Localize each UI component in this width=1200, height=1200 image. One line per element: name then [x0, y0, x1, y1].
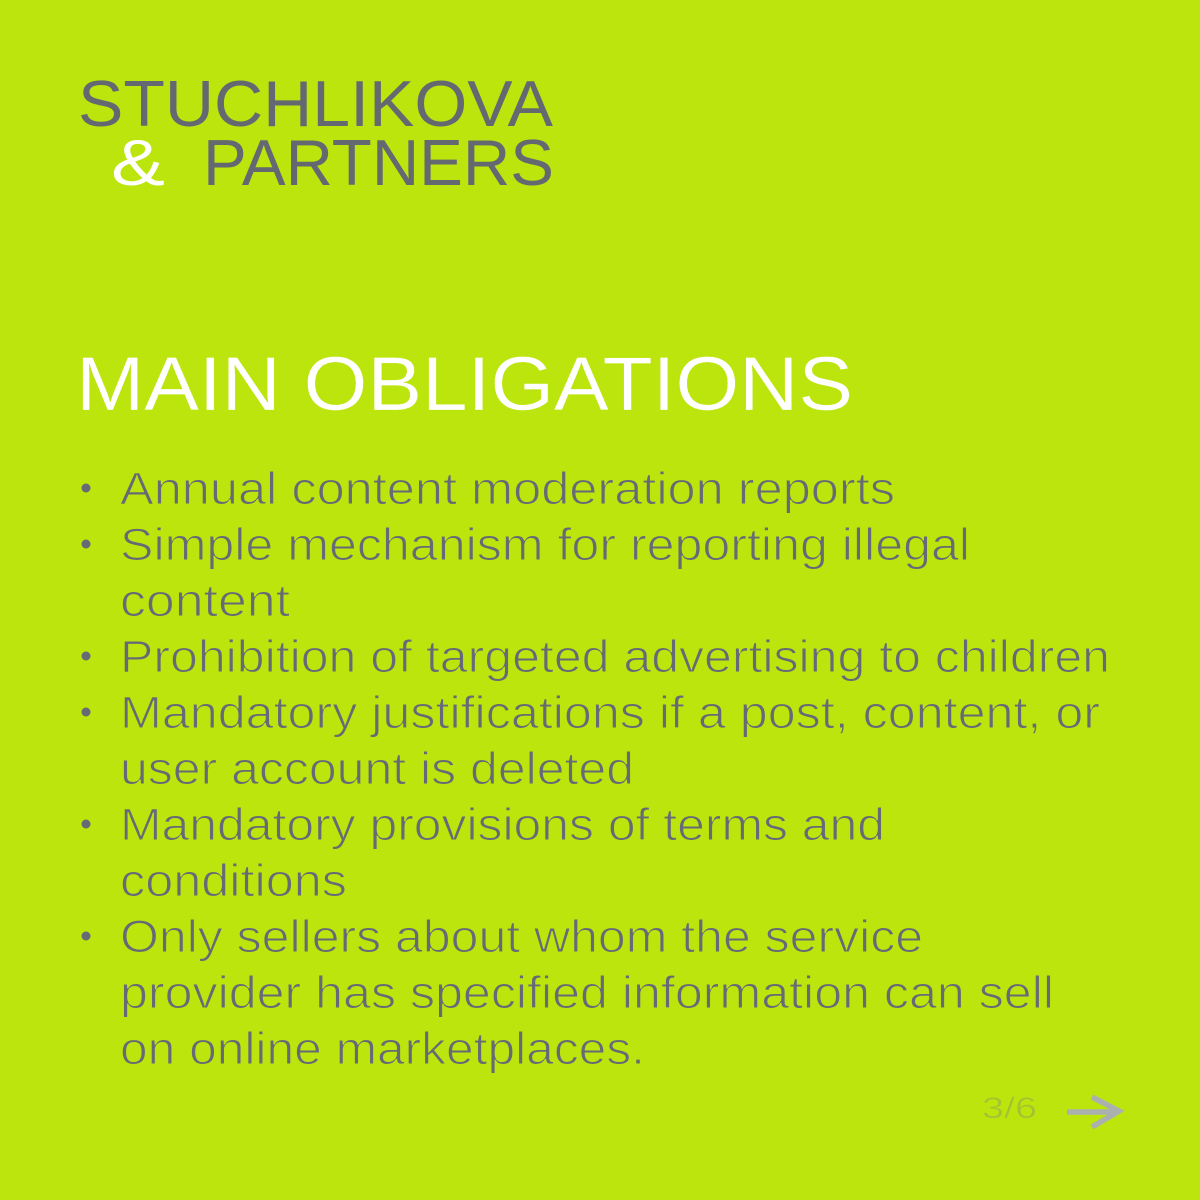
- logo line: PARTNERS: PARTNERS: [203, 126, 554, 199]
- logo: [78, 67, 554, 199]
- page counter: 3/6: [982, 1092, 1037, 1125]
- bullet item: targeted advertising: Prohibition of targeted advertising to children: [120, 631, 1110, 682]
- bullet item: reporting mechanism: Simple mechanism for reporting illegal: [120, 519, 970, 570]
- obligations list: [82, 463, 1110, 1074]
- bullet item: mandatory justifications: user account is deleted: [120, 743, 634, 794]
- heading: main obligations: MAIN OBLIGATIONS: [76, 342, 853, 427]
- bullet item: reporting mechanism: [82, 519, 970, 626]
- bullet item: terms and conditions: Mandatory provisions of terms and: [120, 799, 885, 850]
- bullet item: terms and conditions: [82, 799, 885, 906]
- icon: next arrow: [1067, 1097, 1119, 1127]
- bullet item: marketplace sellers: on online marketplaces.: [120, 1023, 645, 1074]
- bullet item: annual reports: Annual content moderation reports: [120, 463, 895, 514]
- logo line: STUCHLIKOVA: STUCHLIKOVA: [78, 67, 554, 140]
- bullet item: terms and conditions: conditions: [120, 855, 347, 906]
- bullet item: mandatory justifications: Mandatory justifications if a post, content, or: [120, 687, 1100, 738]
- bullet item: marketplace sellers: [82, 911, 1054, 1074]
- bullet item: reporting mechanism: content: [120, 575, 291, 626]
- logo ampersand: &: [111, 126, 165, 199]
- bullet item: mandatory justifications: [82, 687, 1100, 794]
- bullet item: marketplace sellers: provider has specified information can sell: [120, 967, 1054, 1018]
- bullet item: marketplace sellers: Only sellers about whom the service: [120, 911, 923, 962]
